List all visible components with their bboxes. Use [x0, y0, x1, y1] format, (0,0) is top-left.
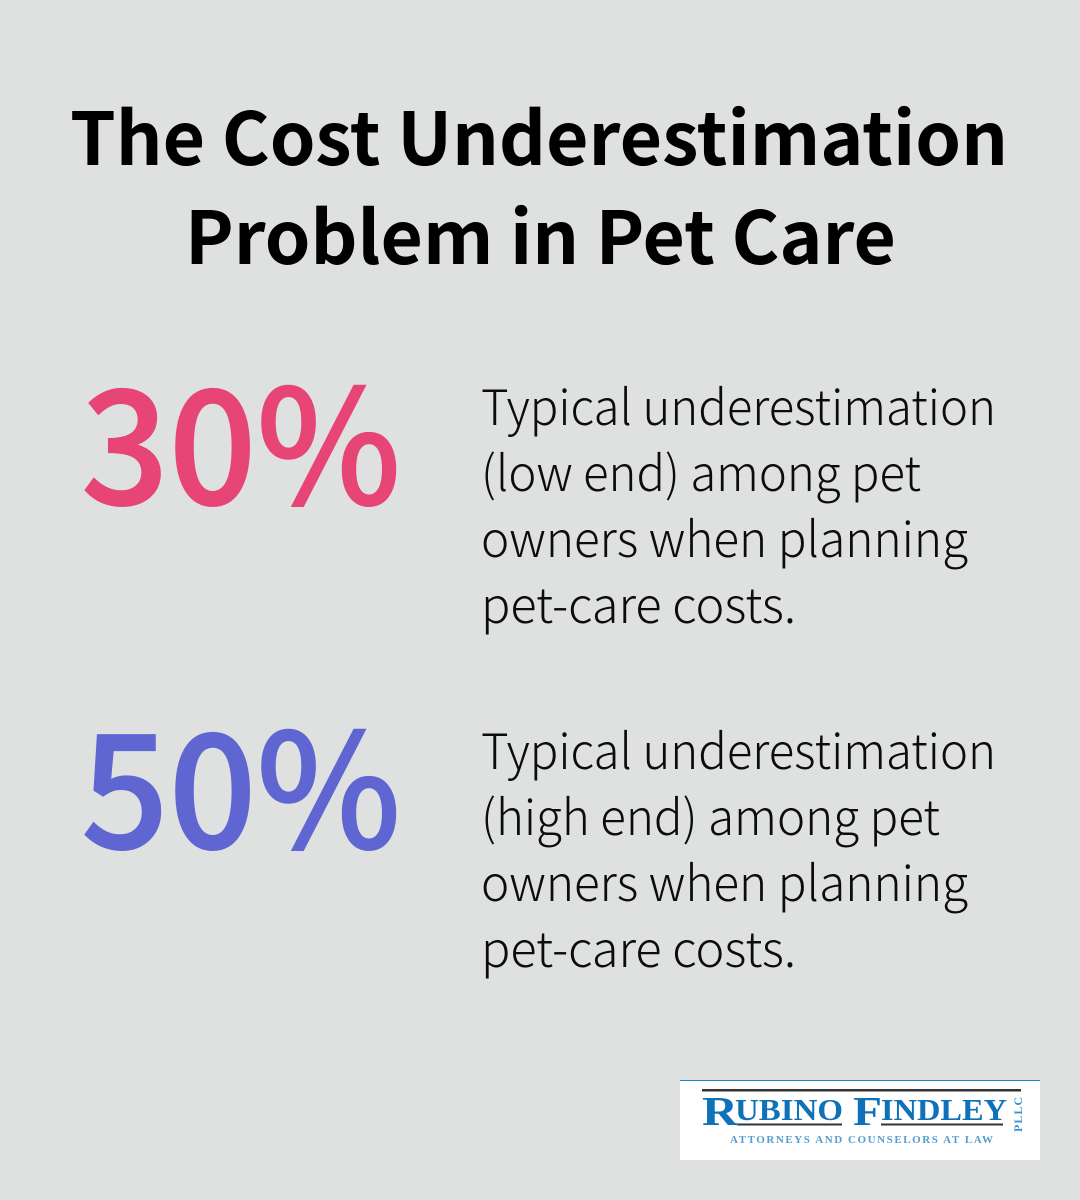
text: high end description: [481, 713, 996, 982]
text: low end description: pet-care costs.: [481, 567, 796, 638]
title: The Cost Underestimation: [70, 81, 1008, 187]
text: high end description: pet-care costs.: [481, 911, 796, 982]
text: high end description: Typical underestimation: [481, 713, 996, 784]
logo: Rubino Findley: UBINO: [735, 1092, 843, 1127]
stat: 50%: 50%: [81, 665, 401, 894]
logo: Rubino Findley: ATTORNEYS AND COUNSELORS AT LAW: [730, 1134, 993, 1146]
stat: 30%: 30%: [81, 321, 401, 550]
title: Problem in Pet Care: [185, 180, 896, 286]
text: high end description: owners when planning: [481, 845, 968, 916]
text: low end description: [481, 369, 996, 638]
logo: Rubino Findley: PLLC: [1011, 1097, 1025, 1132]
text: low end description: (low end) among pet: [481, 435, 921, 506]
text: low end description: owners when planning: [481, 501, 968, 572]
logo: Rubino Findley: [680, 1080, 1040, 1160]
text: low end description: Typical underestimation: [481, 369, 996, 440]
logo: Rubino Findley: INDLEY: [881, 1092, 1007, 1127]
text: high end description: (high end) among pet: [481, 779, 940, 850]
logo: Rubino Findley: R: [702, 1088, 738, 1134]
logo: Rubino Findley: F: [853, 1088, 882, 1134]
title: [70, 81, 1008, 286]
